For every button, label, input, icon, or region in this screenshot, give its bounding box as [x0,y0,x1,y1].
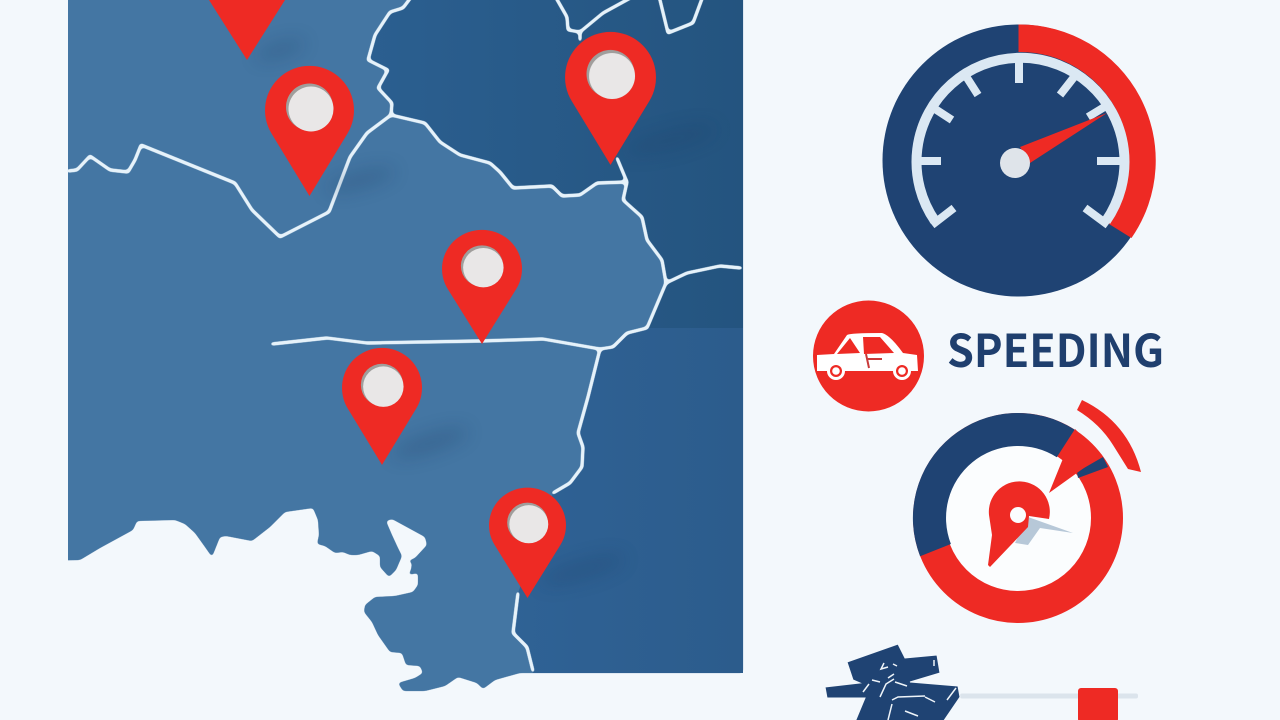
car windows [837,337,894,354]
pin: top, cropped [209,0,285,60]
ring pointer [1049,429,1102,493]
pin: northwest [265,66,354,196]
gauge hub [1000,148,1030,178]
map region: main landmass with coast [40,0,743,691]
bottom slider [825,644,1138,720]
gauge red zone [1018,24,1156,238]
ring blue notch [1077,457,1108,478]
page margin left of map [0,0,68,600]
pin: southwest [342,348,422,465]
slider marker [1078,688,1118,720]
pin shadows [253,35,719,591]
inner pin [988,481,1050,567]
ring face [945,445,1091,591]
map region: southeast [513,328,743,673]
gauge needle [1020,113,1107,163]
inner pin hole [1010,507,1026,523]
map [0,0,743,691]
speedometer gauge [882,24,1156,296]
pin: centre [442,230,522,344]
pin: south [489,488,566,598]
car body [817,333,918,371]
ring gauge with pin [913,400,1141,607]
ring red section [929,429,1107,607]
pin shadow [1015,517,1073,545]
map region: northeast dark [368,0,743,328]
ring outer red arc [1077,400,1141,472]
ring blue section [913,413,1075,556]
gauge ticks [914,60,1122,225]
icon: car badge [813,300,924,412]
heading: speeding: SPEEDING [947,315,1164,380]
gauge scale ring [916,58,1124,221]
car crack [866,354,882,368]
pin: northeast [565,32,656,165]
map region borders [68,0,741,671]
car wheels [827,362,911,380]
icon: navy jagged mark [825,644,960,720]
slider track [960,694,1138,698]
gauge dial [882,24,1154,296]
